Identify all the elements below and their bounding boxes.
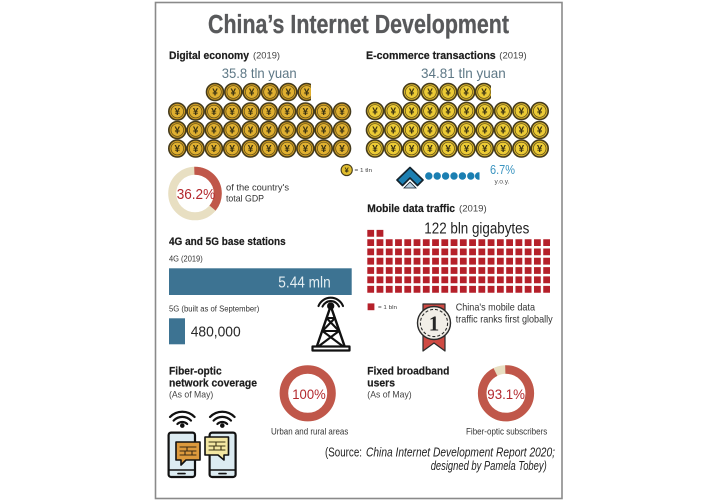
label: 4G: 4G (2019) — [169, 255, 203, 264]
label: 5G: 5G (built as of September) — [169, 305, 260, 314]
legend: coin equals 1 tln: ¥ — [345, 166, 350, 175]
heading: mobile data traffic: Mobile data traffic — [367, 203, 455, 215]
icon: phone left — [169, 433, 195, 477]
icon: yellow chat bubble — [205, 437, 228, 460]
text: ranks first globally: China's mobile data — [456, 302, 535, 314]
heading: digital economy: (2019) — [253, 50, 280, 60]
value: 6.7% y.o.y.: y.o.y. — [494, 178, 510, 186]
donut chart: 93.1%: 93.1% — [487, 386, 525, 402]
label: urban and rural areas: Urban and rural areas — [271, 426, 349, 436]
outer frame — [156, 2, 562, 498]
value: 122 bln gigabytes: 122 bln gigabytes — [424, 220, 530, 237]
value: 6.7% y.o.y. — [490, 162, 515, 186]
legend: square equals 1 bln: = 1 bln — [378, 305, 397, 311]
heading: fixed broadband users: (As of May) — [367, 389, 412, 399]
donut chart: 36.2% of GDP: 36.2% — [177, 187, 215, 203]
heading: fixed broadband users — [367, 365, 449, 399]
coin pictogram: digital economy — [169, 84, 350, 157]
square pictogram: 122 squares — [367, 233, 550, 289]
bar: 4G 5.44 mln: 5.44 mln — [278, 274, 331, 291]
text: share of GDP — [226, 183, 289, 204]
heading: e-commerce: (2019) — [499, 50, 527, 60]
heading: fiber-optic network coverage: (As of May) — [169, 389, 213, 399]
icon: signal tower — [312, 298, 350, 350]
panel: mobile data traffic — [367, 203, 553, 351]
text: share of GDP: of the country's — [226, 183, 289, 193]
text: share of GDP: total GDP — [226, 194, 264, 204]
icon: first-place medal — [418, 304, 450, 351]
source credit — [325, 446, 555, 473]
title: China’s Internet Development — [208, 11, 509, 39]
coin pictogram: digital economy: ¥¥¥¥¥¥¥¥¥¥ — [175, 107, 345, 118]
icon: wifi dot left — [180, 424, 184, 427]
donut chart: 100%: 100% — [292, 386, 326, 402]
panel: 4G and 5G base stations — [169, 236, 352, 350]
icon: up arrow chevrons — [397, 168, 423, 188]
coin pictogram: digital economy: ¥¥¥¥¥¥¥¥¥¥ — [175, 126, 345, 137]
coin pictogram: e-commerce: ¥¥¥¥¥¥¥¥¥¥ — [372, 144, 543, 155]
source credit: (Source: — [325, 446, 362, 460]
growth dots — [425, 172, 482, 180]
source credit: designed by Pamela Tobey) — [431, 459, 547, 473]
coin pictogram: e-commerce: ¥¥¥¥¥ — [409, 88, 487, 99]
coin pictogram: digital economy: ¥¥¥¥¥¥ — [212, 88, 310, 99]
heading: base stations: 4G and 5G base stations — [169, 236, 286, 248]
value: 35.8 tln yuan: 35.8 tln yuan — [222, 65, 297, 81]
coin pictogram: e-commerce: ¥¥¥¥¥¥¥¥¥¥ — [372, 107, 543, 118]
bar: 5G 480,000: 480,000 — [191, 324, 241, 341]
icon: orange chat bubble — [176, 442, 200, 465]
coin pictogram: digital economy: ¥¥¥¥¥¥¥¥¥¥ — [175, 144, 345, 155]
bar: 4G 5.44 mln — [169, 268, 352, 295]
icon: first-place medal: 1 — [429, 312, 439, 336]
donut chart: 100% — [284, 370, 332, 417]
heading: mobile data traffic: (2019) — [459, 204, 487, 214]
text: ranks first globally — [456, 302, 553, 326]
icon: phone right — [210, 433, 236, 477]
legend: coin equals 1 tln: = 1 tln — [354, 168, 372, 174]
legend: square equals 1 bln — [368, 303, 397, 311]
heading: fixed broadband users: users — [367, 378, 395, 390]
source credit: China Internet Development Report 2020; — [366, 446, 555, 460]
donut chart: 93.1% — [482, 370, 530, 417]
donut chart: 36.2% of GDP — [172, 171, 218, 216]
legend: coin equals 1 tln — [341, 164, 372, 176]
panel: e-commerce transactions — [341, 50, 548, 188]
icon: wifi dot right — [220, 424, 224, 427]
heading: digital economy: Digital economy — [169, 50, 250, 62]
text: ranks first globally: traffic ranks first globally — [456, 314, 553, 326]
value: 34.81 tln yuan: 34.81 tln yuan — [421, 65, 506, 81]
icon: wifi right — [210, 412, 235, 424]
value: 6.7% y.o.y.: 6.7% — [490, 162, 515, 177]
icon: wifi left — [170, 412, 195, 424]
icon: wifi phones with chat — [169, 412, 236, 477]
panel: fiber-optic network coverage — [169, 365, 349, 477]
heading: fixed broadband users: Fixed broadband — [367, 365, 449, 377]
heading: fiber-optic network coverage — [169, 365, 257, 399]
coin pictogram: e-commerce: ¥¥¥¥¥¥¥¥¥¥ — [372, 126, 543, 137]
heading: fiber-optic network coverage: Fiber-optic — [169, 365, 222, 377]
panel: fixed broadband users — [367, 365, 548, 436]
panel: digital economy — [169, 50, 350, 216]
heading: e-commerce: E-commerce transactions — [366, 50, 496, 62]
heading: fiber-optic network coverage: network coverage — [169, 378, 257, 390]
coin pictogram: e-commerce — [366, 84, 548, 157]
label: fiber-optic subscribers: Fiber-optic subscribers — [466, 426, 548, 436]
bar: 5G 480,000 — [169, 318, 241, 344]
